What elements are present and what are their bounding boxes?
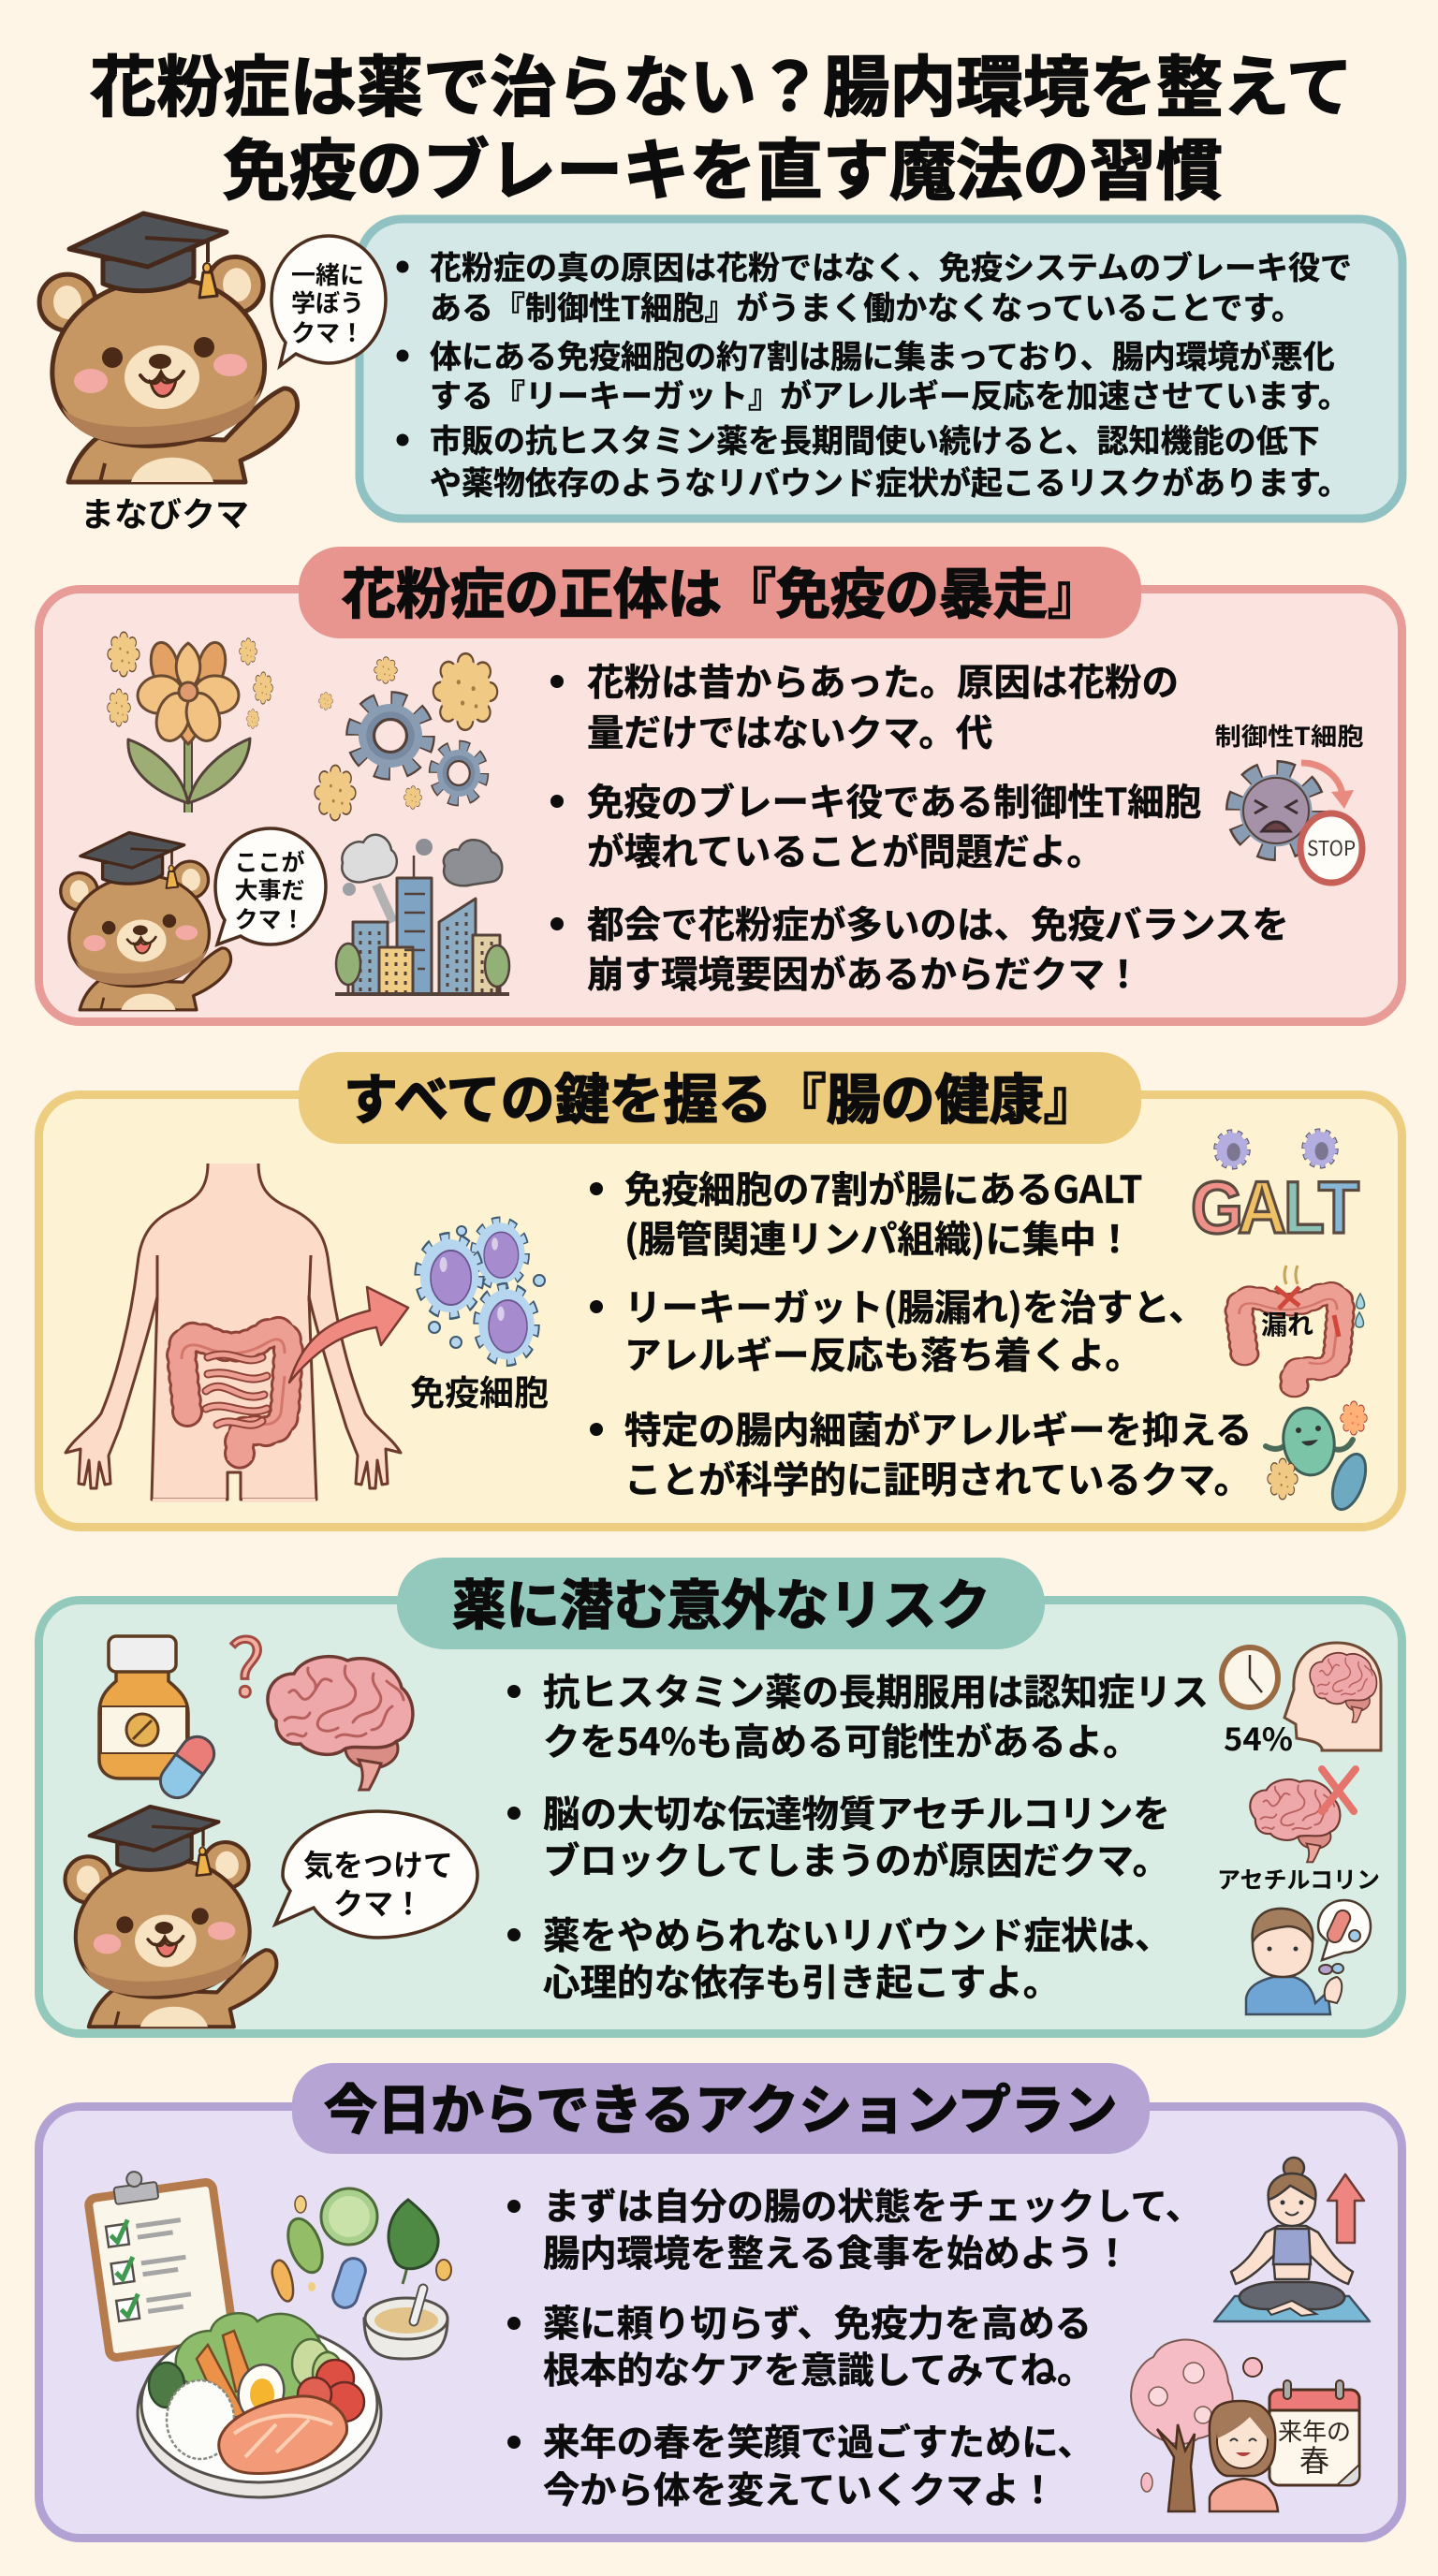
icon: brain xyxy=(268,1657,413,1790)
panel: gut health xyxy=(39,1052,1402,1528)
bullet 1: まずは自分の腸の状態をチェックして、 xyxy=(543,2177,1202,2231)
icon: broken regulatory T cell with stop sign: 制御性T細胞 xyxy=(1215,718,1363,753)
bullet 3: ことが科学的に証明されているクマ。 xyxy=(624,1451,1251,1504)
speech bubble: 一緒に学ぼうクマ！: クマ！ xyxy=(291,315,364,349)
icon: bowl with spoon xyxy=(364,2289,448,2359)
bullet 3: 都会で花粉症が多いのは、免疫バランスを xyxy=(587,896,1289,949)
speech bubble: 気をつけてクマ！: クマ！ xyxy=(333,1881,423,1924)
bullet 1: 腸内環境を整える食事を始めよう！ xyxy=(543,2224,1131,2277)
title xyxy=(90,33,1353,213)
title: 花粉症は薬で治らない？腸内環境を整えて xyxy=(90,33,1353,130)
bullet 3: 来年の春を笑顔で過ごすために、 xyxy=(543,2413,1094,2466)
bullet 1: 免疫細胞の7割が腸にあるGALT xyxy=(624,1161,1142,1214)
panel: summary xyxy=(360,219,1402,519)
bullet 1: クを54%も高める可能性があるよ。 xyxy=(543,1713,1140,1766)
icon: flower with pollen xyxy=(110,637,271,812)
bullet 2 xyxy=(590,1279,1206,1380)
bullet 1 xyxy=(507,1663,1209,1766)
icon: acetylcholine brain with cross: アセチルコリン xyxy=(1217,1862,1380,1895)
speech bubble: 一緒に学ぼうクマ！: 学ぼう xyxy=(291,285,364,319)
bullet 3: 崩す環境要因があるからだクマ！ xyxy=(587,945,1142,999)
speech bubble: ここが大事だクマ！ xyxy=(215,828,326,944)
bullet 2: 脳の大切な伝達物質アセチルコリンを xyxy=(543,1785,1170,1838)
bullet 2: アレルギー反応も落ち着くよ。 xyxy=(624,1326,1142,1380)
icon: acetylcholine brain with cross xyxy=(1217,1769,1380,1895)
icon: GALT wordmark with cells xyxy=(1191,1132,1359,1250)
bullet 2: リーキーガット(腸漏れ)を治すと、 xyxy=(624,1279,1206,1332)
icon: cherry tree, woman and calendar: 春 xyxy=(1299,2437,1329,2481)
summary bullet 1: ある『制御性T細胞』がうまく働かなくなっていることです。 xyxy=(430,283,1303,329)
panel: immune runaway xyxy=(39,547,1402,1022)
bullet 3: 心理的な依存も引き起こすよ。 xyxy=(543,1954,1060,2007)
bullet 3: 今から体を変えていくクマよ！ xyxy=(543,2461,1056,2514)
icon: gut bacteria xyxy=(1266,1405,1372,1514)
bullet 3: 特定の腸内細菌がアレルギーを抑える xyxy=(624,1401,1252,1455)
illustration: body with intestines xyxy=(66,1164,401,1500)
icon: vegetables and supplements xyxy=(272,2188,451,2311)
bullet 3 xyxy=(550,896,1289,999)
summary bullet 3 xyxy=(397,416,1350,504)
mascot: bear xyxy=(63,1807,276,2027)
bullet 3 xyxy=(507,1907,1172,2007)
icon: city with smog xyxy=(335,835,509,994)
icon: cherry tree, woman and calendar: 来年の xyxy=(1278,2413,1351,2448)
icon: clock and head with brain, 54%: 54% xyxy=(1224,1715,1293,1760)
label: immune cells: 免疫細胞 xyxy=(410,1365,549,1415)
heading pill: 花粉症の正体は『免疫の暴走』 xyxy=(342,550,1102,629)
icon: question mark: ? xyxy=(227,1606,265,1720)
speech bubble: 一緒に学ぼうクマ！: 一緒に xyxy=(291,256,364,291)
icon: yoga woman with up arrow xyxy=(1214,2158,1370,2321)
heading pill: 薬に潜む意外なリスク xyxy=(452,1561,990,1640)
heading pill: すべての鍵を握る『腸の健康』 xyxy=(344,1056,1098,1134)
bullet 1: 抗ヒスタミン薬の長期服用は認知症リス xyxy=(543,1663,1209,1717)
icon: clock and head with brain, 54% xyxy=(1222,1643,1381,1760)
icon: GALT wordmark with cells: L xyxy=(1284,1166,1325,1250)
bullet 3 xyxy=(507,2413,1094,2514)
summary bullet 2 xyxy=(397,331,1350,417)
bullet 2: 根本的なケアを意識してみてね。 xyxy=(543,2341,1093,2394)
icon: GALT wordmark with cells: A xyxy=(1238,1166,1286,1250)
icon: broken regulatory T cell with stop sign xyxy=(1215,718,1363,883)
panel: medication risks xyxy=(39,1558,1402,2033)
icon: GALT wordmark with cells: T xyxy=(1318,1166,1359,1250)
bullet 2: が壊れていることが問題だよ。 xyxy=(587,823,1104,876)
icon: GALT wordmark with cells: G xyxy=(1191,1166,1243,1250)
bullet 2 xyxy=(550,773,1201,876)
icon: broken regulatory T cell with stop sign: STOP xyxy=(1307,832,1356,862)
bullet 3 xyxy=(590,1401,1252,1504)
bullet 2 xyxy=(507,1785,1170,1885)
mascot: graduate bear with name label xyxy=(37,213,297,536)
summary bullet 2: する『リーキーガット』がアレルギー反応を加速させています。 xyxy=(430,371,1350,417)
panel: action plan xyxy=(39,2063,1402,2539)
icon: plate of food xyxy=(138,2313,381,2497)
icon: leaky gut: 漏れ xyxy=(1261,1305,1313,1342)
title: 免疫のブレーキを直す魔法の習慣 xyxy=(223,116,1223,213)
bullet 1: (腸管関連リンパ組織)に集中！ xyxy=(624,1210,1133,1264)
bullet 3: 薬をやめられないリバウンド症状は、 xyxy=(543,1907,1172,1960)
arrow: intestines to immune cells xyxy=(289,1287,408,1383)
bullet 1 xyxy=(590,1161,1142,1264)
bullet 1 xyxy=(507,2177,1202,2277)
summary bullet 1: 花粉症の真の原因は花粉ではなく、免疫システムのブレーキ役で xyxy=(430,242,1352,288)
icon: cherry tree, woman and calendar xyxy=(1131,2340,1359,2511)
speech bubble: ここが大事だクマ！: 大事だ xyxy=(234,872,305,906)
bullet 1: 花粉は昔からあった。原因は花粉の xyxy=(587,653,1179,707)
speech bubble: ここが大事だクマ！: クマ！ xyxy=(234,901,305,935)
summary bullet 3: 市販の抗ヒスタミン薬を長期間使い続けると、認知機能の低下 xyxy=(430,416,1320,461)
icon: gears and pollen xyxy=(319,660,491,815)
speech bubble: 気をつけてクマ！: 気をつけて xyxy=(303,1842,453,1885)
icon: immune cells xyxy=(420,1222,545,1359)
speech bubble: 気をつけてクマ！ xyxy=(275,1811,477,1938)
summary bullet 2: 体にある免疫細胞の約7割は腸に集まっており、腸内環境が悪化 xyxy=(430,331,1335,377)
summary bullet 3: や薬物依存のようなリバウンド症状が起こるリスクがあります。 xyxy=(430,458,1350,504)
speech bubble: 一緒に学ぼうクマ！ xyxy=(271,236,386,366)
bullet 1 xyxy=(550,653,1179,757)
summary bullet 1 xyxy=(397,242,1352,329)
bullet 2: 免疫のブレーキ役である制御性T細胞 xyxy=(587,773,1201,827)
icon: person thinking of pills xyxy=(1246,1900,1371,2014)
mascot: graduate bear with name label: まなびクマ xyxy=(81,488,249,536)
bullet 1: 量だけではないクマ。代 xyxy=(587,704,992,757)
icon: clipboard checklist xyxy=(85,2161,234,2359)
heading pill: 今日からできるアクションプラン xyxy=(324,2068,1118,2144)
bullet 2 xyxy=(507,2294,1093,2394)
bullet 2: ブロックしてしまうのが原因だクマ。 xyxy=(543,1832,1169,1885)
mascot: bear xyxy=(59,832,231,1010)
bullet 2: 薬に頼り切らず、免疫力を高める xyxy=(543,2294,1092,2348)
speech bubble: ここが大事だクマ！: ここが xyxy=(234,844,305,878)
icon: leaky gut xyxy=(1240,1266,1365,1391)
icon: medicine bottle with capsule xyxy=(99,1636,221,1805)
